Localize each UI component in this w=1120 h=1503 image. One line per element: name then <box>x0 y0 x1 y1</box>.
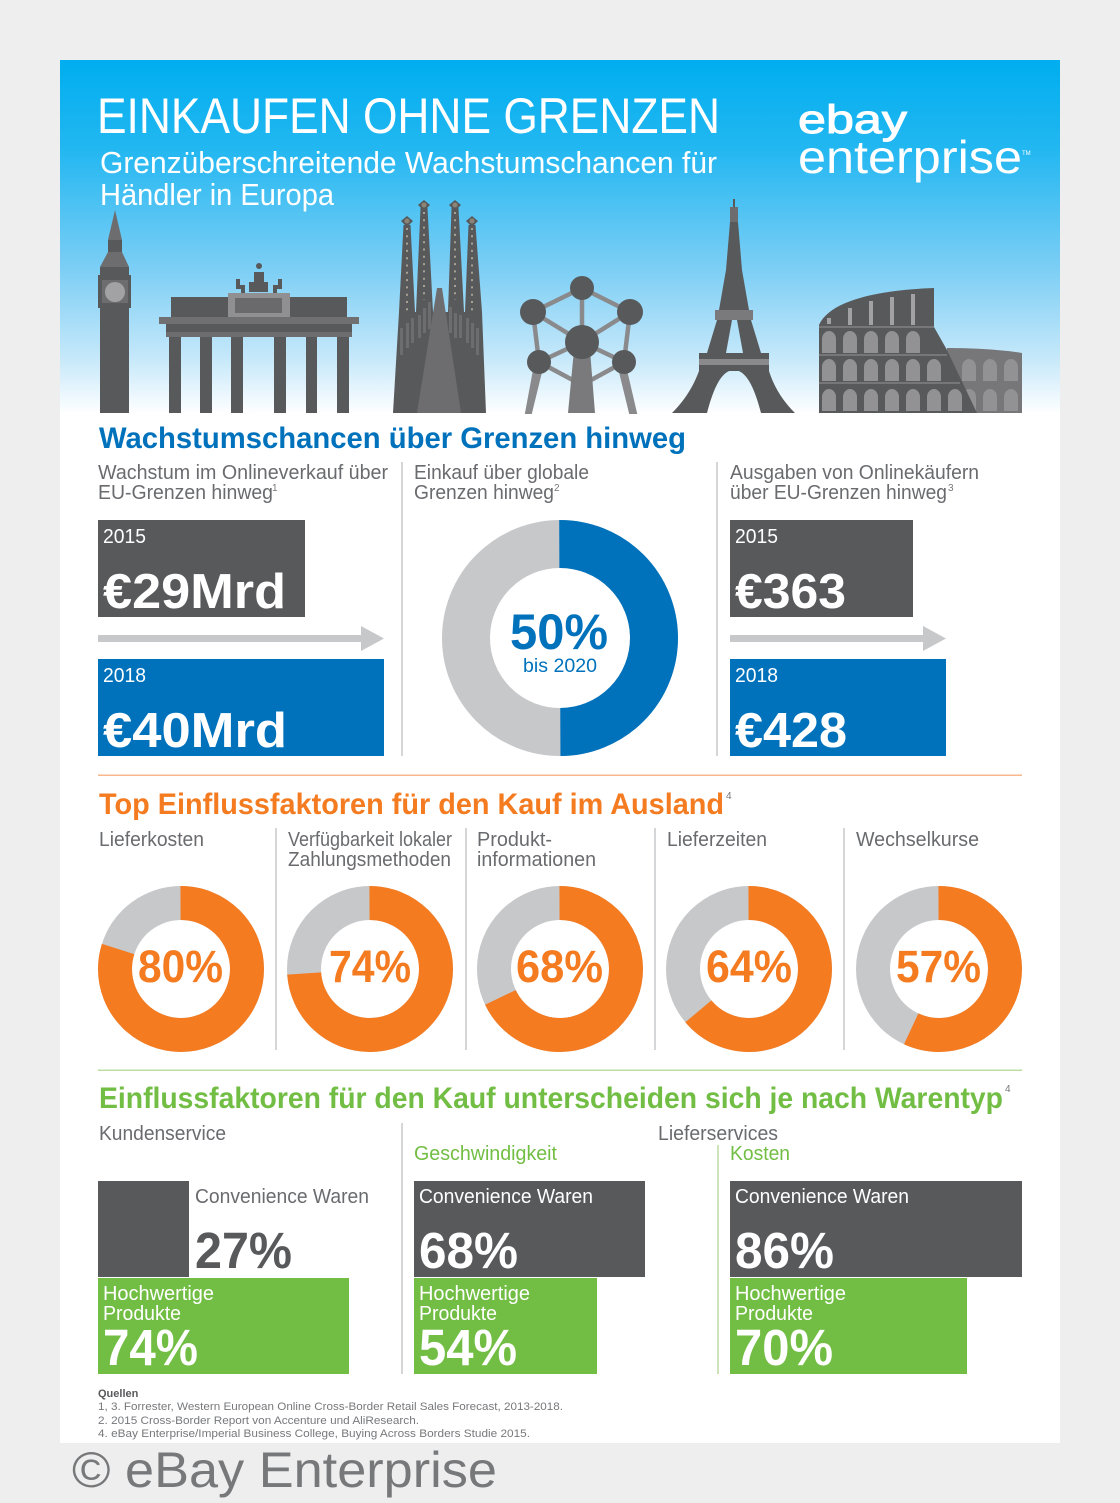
bar: premium products 74%: Hochwertige <box>103 1283 214 1305</box>
bar: premium products 70%: Hochwertige <box>735 1283 846 1305</box>
icon: Big Ben <box>98 210 131 413</box>
text block: global purchases caption: 2 <box>554 483 560 494</box>
panel: product information: Produkt- <box>477 829 552 851</box>
logo: ebay enterprise: ebay <box>798 98 907 142</box>
panel: delivery costs <box>99 829 247 1035</box>
donut chart: 64%: 64% <box>706 941 792 992</box>
panel: delivery costs: Lieferkosten <box>99 829 204 851</box>
donut chart: 50%: bis 2020 <box>523 656 597 677</box>
text block: global purchases caption <box>414 462 589 504</box>
panel: product information <box>477 829 626 1035</box>
heading: growth opportunities: Wachstumschancen über Grenzen hinweg <box>99 422 686 455</box>
bar: premium products 74%: Produkte <box>103 1303 181 1325</box>
bar: convenience goods 27%: Convenience Waren <box>195 1186 369 1208</box>
text block: spending caption: Ausgaben von Onlinekäufern <box>730 462 979 484</box>
bar: 2018 spending <box>730 659 946 758</box>
panel: delivery times <box>667 829 815 1035</box>
subtitle: Händler in Europa <box>100 177 335 212</box>
bar: 2015 spending: 2015 <box>735 526 778 548</box>
bar: 2018 spending: 2018 <box>735 665 778 687</box>
panel: exchange rates: Wechselkurse <box>856 829 979 851</box>
bar: premium products 70%: Produkte <box>735 1303 813 1325</box>
text block: global purchases caption: Grenzen hinweg <box>414 482 554 504</box>
heading: top influencing factors: Top Einflussfaktoren für den Kauf im Ausland <box>99 788 724 821</box>
text block: sources: 2. 2015 Cross-Border Report von Accenture und AliResearch. <box>98 1415 419 1427</box>
panel: online sales growth <box>98 462 388 758</box>
donut chart: 57% <box>873 903 1005 1035</box>
icon: Sagrada Familia <box>393 200 486 413</box>
label: delivery services: Lieferservices <box>658 1123 778 1145</box>
footer: copyright: © eBay Enterprise <box>72 1442 497 1498</box>
bar: premium products 54%: Hochwertige <box>419 1283 530 1305</box>
bar: 2018 sales: €40Mrd <box>103 704 287 758</box>
bar: 2015 sales <box>98 520 305 619</box>
text block: online sales caption: EU-Grenzen hinweg <box>98 482 273 504</box>
bar: premium products 54% <box>414 1278 597 1376</box>
panel: delivery speed <box>414 1143 645 1376</box>
donut chart: 80%: 80% <box>138 941 223 992</box>
subtitle <box>100 145 717 212</box>
panel: exchange rates <box>856 829 1005 1035</box>
donut chart: 68% <box>494 903 626 1035</box>
heading: factors by product type: 4 <box>1005 1084 1011 1095</box>
donut chart: 74% <box>304 903 436 1035</box>
bar: 2015 spending <box>730 520 913 619</box>
bar: premium products 54%: Produkte <box>419 1303 497 1325</box>
panel: local payment methods: Verfügbarkeit lokaler <box>288 829 452 851</box>
text block: global purchases caption: Einkauf über globale <box>414 462 589 484</box>
bar: convenience goods 68%: Convenience Waren <box>419 1186 593 1208</box>
heading: top influencing factors: 4 <box>726 791 732 802</box>
bar: convenience goods 27%: 27% <box>195 1222 292 1279</box>
text block: sources: Quellen <box>98 1388 139 1400</box>
logo: ebay enterprise <box>798 98 1031 183</box>
bar: 2018 sales <box>98 659 384 758</box>
bar: premium products 74% <box>98 1278 349 1376</box>
donut chart: 74%: 74% <box>329 941 411 992</box>
text block: sources: 4. eBay Enterprise/Imperial Business College, Buying Across Borders Studie 2015. <box>98 1428 530 1440</box>
panel: delivery times: Lieferzeiten <box>667 829 767 851</box>
text block: spending caption: 3 <box>948 483 954 494</box>
icon: Eiffel Tower <box>672 199 795 413</box>
panel: global purchases <box>414 462 654 732</box>
arrow <box>98 626 384 651</box>
donut chart: 50% <box>466 544 654 732</box>
bar: premium products 70%: 70% <box>735 1319 833 1376</box>
panel: delivery cost: Kosten <box>730 1143 790 1165</box>
bar: convenience goods 68% <box>414 1181 645 1279</box>
bar: convenience goods 68%: 68% <box>419 1222 518 1279</box>
text block: online sales caption: Wachstum im Onlineverkauf über <box>98 462 388 484</box>
donut chart: 68%: 68% <box>516 941 603 992</box>
icon: Colosseum <box>819 288 1022 413</box>
heading: factors by product type: Einflussfaktoren für den Kauf unterscheiden sich je nach Warentyp <box>99 1082 1003 1115</box>
panel: product information: informationen <box>477 849 596 871</box>
text block: sources <box>98 1388 563 1440</box>
bar: convenience goods 86% <box>730 1181 1022 1279</box>
icon: Atomium <box>520 276 643 413</box>
bar: 2018 spending: €428 <box>735 704 847 758</box>
donut chart: 80% <box>115 903 247 1035</box>
panel: delivery speed: Geschwindigkeit <box>414 1143 557 1165</box>
donut chart: 50%: 50% <box>510 604 608 660</box>
bar: 2015 sales: €29Mrd <box>103 565 286 619</box>
logo: ebay enterprise: enterprise <box>798 131 1022 183</box>
bar: premium products 70% <box>730 1278 967 1376</box>
bar: 2015 spending: €363 <box>735 565 846 619</box>
donut chart: 57%: 57% <box>896 941 981 992</box>
bar: convenience goods 27% <box>98 1181 369 1279</box>
text block: sources: 1, 3. Forrester, Western European Online Cross-Border Retail Sales Forecast, 2013-2018. <box>98 1401 563 1413</box>
bar: convenience goods 86%: Convenience Waren <box>735 1186 909 1208</box>
panel: customer service: Kundenservice <box>99 1123 226 1145</box>
subtitle: Grenzüberschreitende Wachstumschancen für <box>100 145 717 180</box>
arrow <box>730 626 946 651</box>
bar: 2018 sales: 2018 <box>103 665 146 687</box>
panel: online shopper spending <box>730 462 979 758</box>
bar: 2015 sales: 2015 <box>103 526 146 548</box>
icon: Brandenburg Gate <box>159 263 359 413</box>
panel: customer service <box>98 1123 369 1376</box>
panel: local payment methods <box>288 829 452 1035</box>
panel: header sky <box>60 60 1060 414</box>
text block: online sales caption: 1 <box>272 483 278 494</box>
bar: premium products 74%: 74% <box>103 1319 198 1376</box>
panel: delivery cost <box>730 1143 1022 1376</box>
text block: spending caption <box>730 462 979 504</box>
logo: ebay enterprise: TM <box>1022 151 1031 157</box>
bar: convenience goods 86%: 86% <box>735 1222 834 1279</box>
text block: spending caption: über EU-Grenzen hinweg <box>730 482 947 504</box>
donut chart: 64% <box>683 903 815 1035</box>
bar: premium products 54%: 54% <box>419 1319 517 1376</box>
panel: local payment methods: Zahlungsmethoden <box>288 849 451 871</box>
title: EINKAUFEN OHNE GRENZEN <box>97 88 720 144</box>
text block: online sales caption <box>98 462 388 504</box>
